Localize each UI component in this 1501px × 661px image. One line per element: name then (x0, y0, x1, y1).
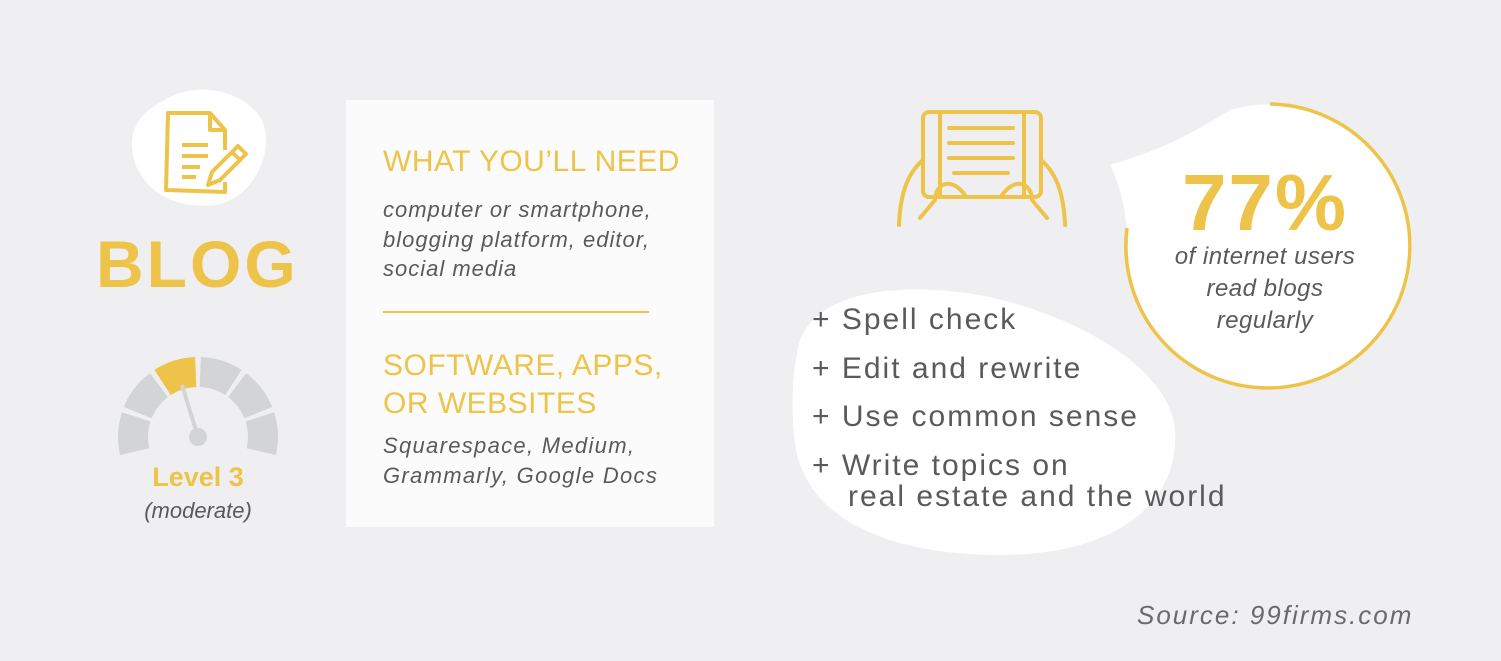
heading: software: OR WEBSITES (383, 387, 597, 420)
text: software list: Grammarly, Google Docs (383, 463, 658, 488)
text: tips: + Write topics on (812, 448, 1070, 482)
text: tips: + Edit and rewrite (812, 352, 1082, 384)
text: stat description: read blogs (1206, 275, 1324, 302)
heading: what you'll need: WHAT YOU’LL NEED (383, 145, 680, 178)
text: stat description: of internet users (1175, 243, 1355, 270)
text: tips: + Use common sense (812, 400, 1139, 433)
gauge: level meter (118, 357, 278, 455)
text: software list: Squarespace, Medium, (383, 433, 635, 458)
text: software list (383, 433, 658, 488)
icon: document with pencil in white blob (132, 90, 266, 206)
text: needs list: social media (383, 256, 517, 281)
text: Level 3: Level 3 (152, 462, 244, 492)
text: 77%: 77% (1182, 158, 1348, 247)
text: needs list: computer or smartphone, (383, 197, 652, 222)
text: tip continuation: real estate and the world (848, 480, 1227, 513)
text: moderate: (moderate) (144, 498, 252, 523)
text: needs list: blogging platform, editor, (383, 226, 650, 252)
text: needs list (383, 197, 652, 281)
heading: software (383, 349, 663, 420)
panel: tips list blob (792, 290, 1227, 555)
text: stat description: regularly (1217, 307, 1313, 334)
text: tips: + Spell check (812, 303, 1017, 336)
callout: 77% statistic bubble (1110, 102, 1412, 390)
text: stat description (1175, 243, 1355, 334)
heading: software: SOFTWARE, APPS, (383, 349, 663, 382)
source: Source: 99firms.com (1137, 600, 1413, 630)
text: tips (812, 303, 1139, 482)
icon: hands holding tablet (897, 110, 1067, 227)
title: BLOG: BLOG (96, 227, 299, 301)
panel: what you'll need (346, 100, 714, 527)
